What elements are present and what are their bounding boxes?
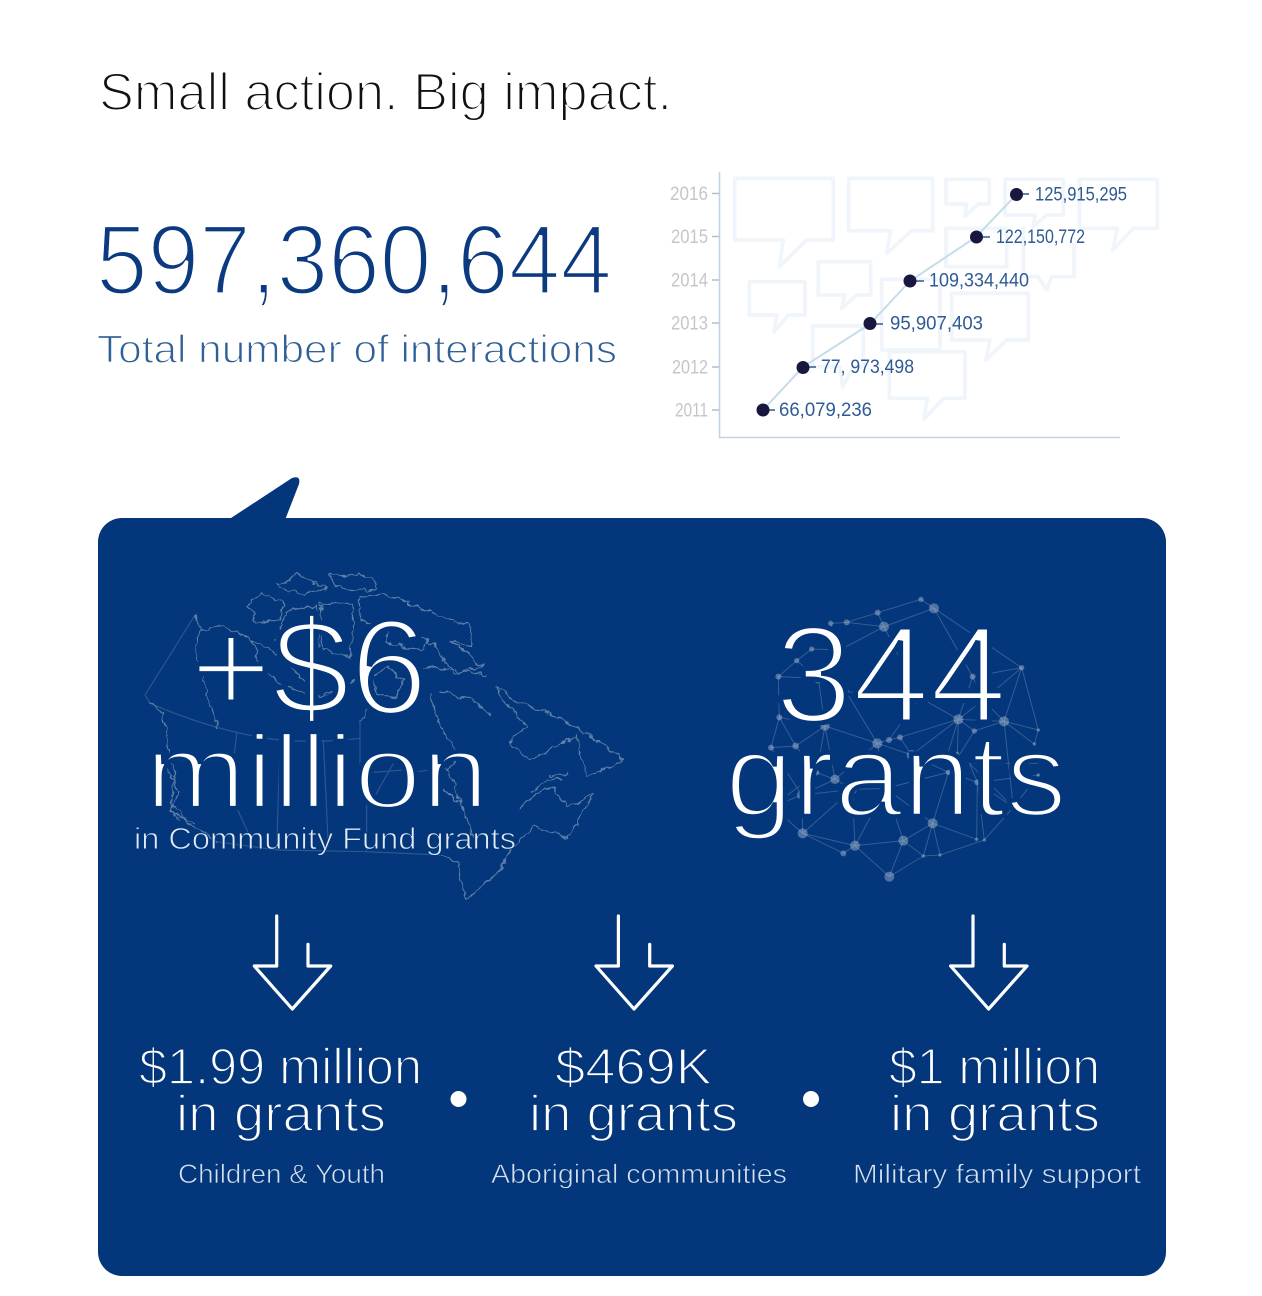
year labels: 2011	[675, 400, 708, 422]
icon: down arrow	[596, 916, 672, 1009]
total interactions number: 597,360,644	[96, 204, 612, 315]
separator dot	[450, 1091, 466, 1107]
value labels: 95,907,403	[890, 314, 983, 334]
year labels: 2014	[671, 270, 708, 292]
column: Military family support	[853, 916, 1142, 1189]
chart axes	[720, 172, 1120, 438]
million: million	[145, 714, 489, 831]
column: Children & Youth	[139, 916, 422, 1189]
network links	[771, 599, 1038, 877]
icon: down arrow	[951, 916, 1027, 1009]
data points	[756, 188, 1023, 416]
trend line	[763, 194, 1017, 410]
category: Military family support	[853, 1159, 1142, 1189]
in Community Fund grants: in Community Fund grants	[134, 821, 516, 856]
year labels: 2015	[671, 227, 708, 248]
in grants: in grants	[176, 1085, 386, 1142]
panel: community fund grants speech bubble	[98, 477, 1166, 1276]
title: Small action. Big impact.	[99, 63, 672, 122]
in grants: in grants	[890, 1085, 1100, 1142]
category: Aboriginal communities	[491, 1159, 787, 1189]
in grants: in grants	[529, 1085, 738, 1142]
stat: 344 grants	[725, 598, 1067, 842]
year labels: 2016	[670, 184, 708, 205]
value labels: 125,915,295	[1035, 184, 1127, 206]
stat: +$6 million	[134, 591, 516, 856]
amount: $1.99 million	[139, 1038, 422, 1095]
value labels: 77, 973,498	[821, 357, 914, 378]
bubble tail	[228, 477, 299, 520]
line chart: interactions per year	[670, 172, 1157, 438]
grants: grants	[725, 710, 1067, 842]
straight provincial borders	[145, 615, 447, 855]
leader dashes	[763, 194, 1029, 410]
axis ticks	[712, 194, 719, 410]
total interactions caption: Total number of interactions	[97, 328, 617, 372]
category: Children & Youth	[178, 1159, 385, 1189]
value labels	[779, 184, 1127, 421]
344: 344	[775, 598, 1007, 752]
value labels: 109,334,440	[929, 270, 1029, 292]
+$6: +$6	[190, 591, 428, 743]
chart background speech bubbles	[735, 178, 1157, 419]
network nodes	[768, 597, 1040, 882]
column: Aboriginal communities	[491, 916, 787, 1189]
map of Canada	[145, 573, 623, 900]
amount: $1 million	[889, 1038, 1100, 1095]
amount: $469K	[555, 1038, 712, 1095]
rough coastlines	[150, 573, 623, 900]
year labels	[670, 184, 708, 422]
bubble body	[98, 518, 1166, 1276]
year labels: 2012	[672, 358, 708, 378]
network graphic	[768, 597, 1040, 882]
separator dot	[803, 1091, 819, 1107]
year labels: 2013	[671, 314, 708, 334]
icon: down arrow	[254, 916, 331, 1009]
value labels: 122,150,772	[996, 227, 1085, 248]
value labels: 66,079,236	[779, 400, 872, 421]
